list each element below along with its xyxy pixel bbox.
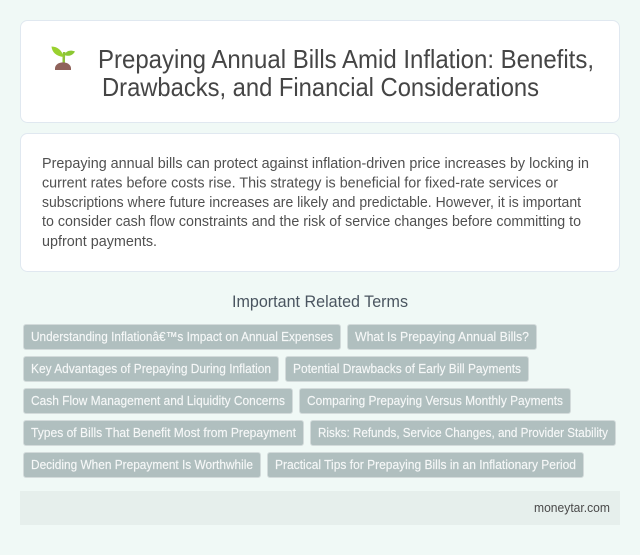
chip: Potential Drawbacks of Early Bill Payments <box>293 361 521 376</box>
panel: summary paragraph: upfront payments. <box>42 233 157 250</box>
chip: Practical Tips for Prepaying Bills in an Inflationary Period <box>275 457 576 472</box>
chip: Deciding When Prepayment Is Worthwhile <box>31 457 253 472</box>
chip <box>348 324 536 350</box>
chip: Risks: Refunds, Service Changes, and Provider Stability <box>318 425 608 440</box>
chip <box>24 324 340 350</box>
chip: What Is Prepaying Annual Bills? <box>355 329 529 344</box>
chip <box>300 388 570 414</box>
title text <box>98 44 594 102</box>
title text: Drawbacks, and Financial Considerations <box>102 72 539 102</box>
chip <box>286 356 528 382</box>
chip <box>268 452 584 478</box>
heading: related terms: Important Related Terms <box>232 293 408 311</box>
panel: summary paragraph: subscriptions where future increases are likely and predictable. However, it is important <box>42 194 582 211</box>
chip: Types of Bills That Benefit Most from Prepayment <box>31 425 296 440</box>
chip: Cash Flow Management and Liquidity Concerns <box>31 393 285 408</box>
panel: summary paragraph: current rates before costs rise. This strategy is beneficial for fixed-rate services or <box>42 174 558 192</box>
panel: summary paragraph: to consider cash flow constraints and the risk of service changes before committing to <box>42 213 581 230</box>
chip: Understanding Inflationâ€™s Impact on Annual Expenses <box>31 329 333 344</box>
chip <box>24 356 278 382</box>
panel: title card <box>20 20 620 122</box>
icon: seedling <box>52 46 75 70</box>
chip <box>24 388 292 414</box>
title text: Prepaying Annual Bills Amid Inflation: Benefits, <box>98 44 594 74</box>
chip <box>24 420 304 446</box>
chip <box>310 420 616 446</box>
panel: summary paragraph <box>20 134 620 272</box>
chip <box>24 452 260 478</box>
panel: summary paragraph: Prepaying annual bills can protect against inflation-driven price increases by locking in <box>42 155 589 172</box>
chip group: related terms <box>24 324 616 478</box>
footer bar: moneytar.com <box>534 500 610 515</box>
footer bar <box>20 491 620 525</box>
chip: Key Advantages of Prepaying During Inflation <box>31 361 271 376</box>
chip: Comparing Prepaying Versus Monthly Payments <box>307 393 563 408</box>
